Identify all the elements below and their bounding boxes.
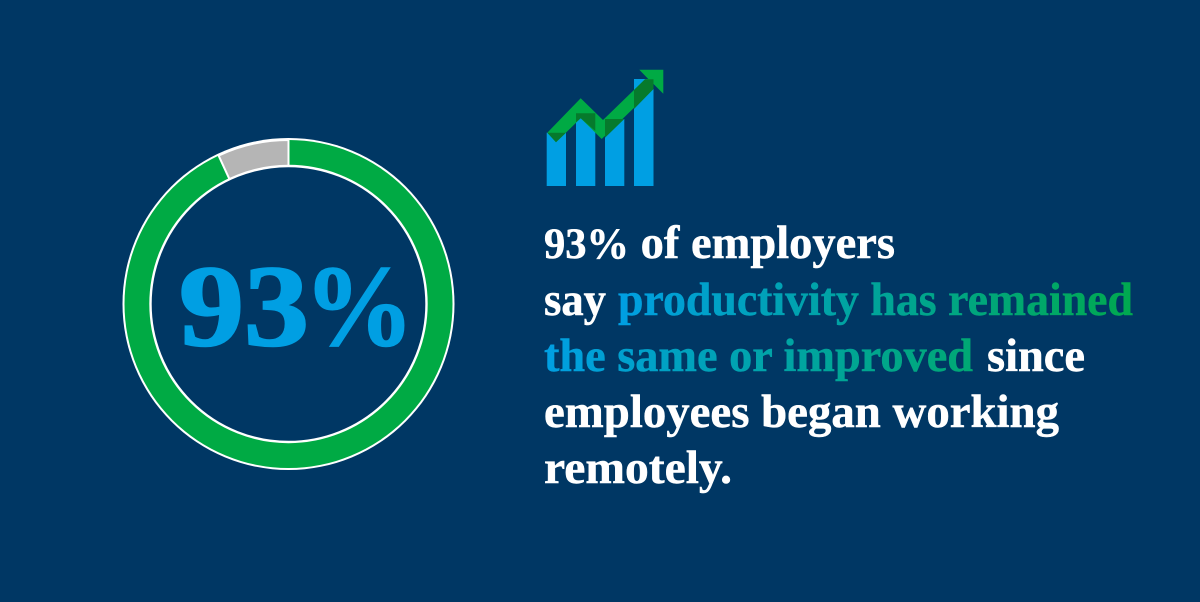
headline statement	[544, 217, 1133, 494]
icon: rising bar chart with arrow	[547, 70, 663, 186]
line 5: remotely.	[544, 442, 732, 494]
donut centre value	[179, 243, 414, 371]
donut segment: remaining 7 percent	[219, 140, 288, 180]
donut chart: 93 percent	[122, 138, 454, 470]
line 1: 93% of employers	[544, 217, 895, 269]
donut centre value: 93	[179, 243, 309, 371]
line 3: the same or improved	[544, 330, 973, 382]
donut centre value: %	[304, 243, 414, 371]
line 4: employees began working	[544, 386, 1059, 438]
line 2: productivity has remained	[618, 274, 1133, 326]
line 3: since	[987, 330, 1085, 382]
line 2: say	[544, 274, 606, 326]
